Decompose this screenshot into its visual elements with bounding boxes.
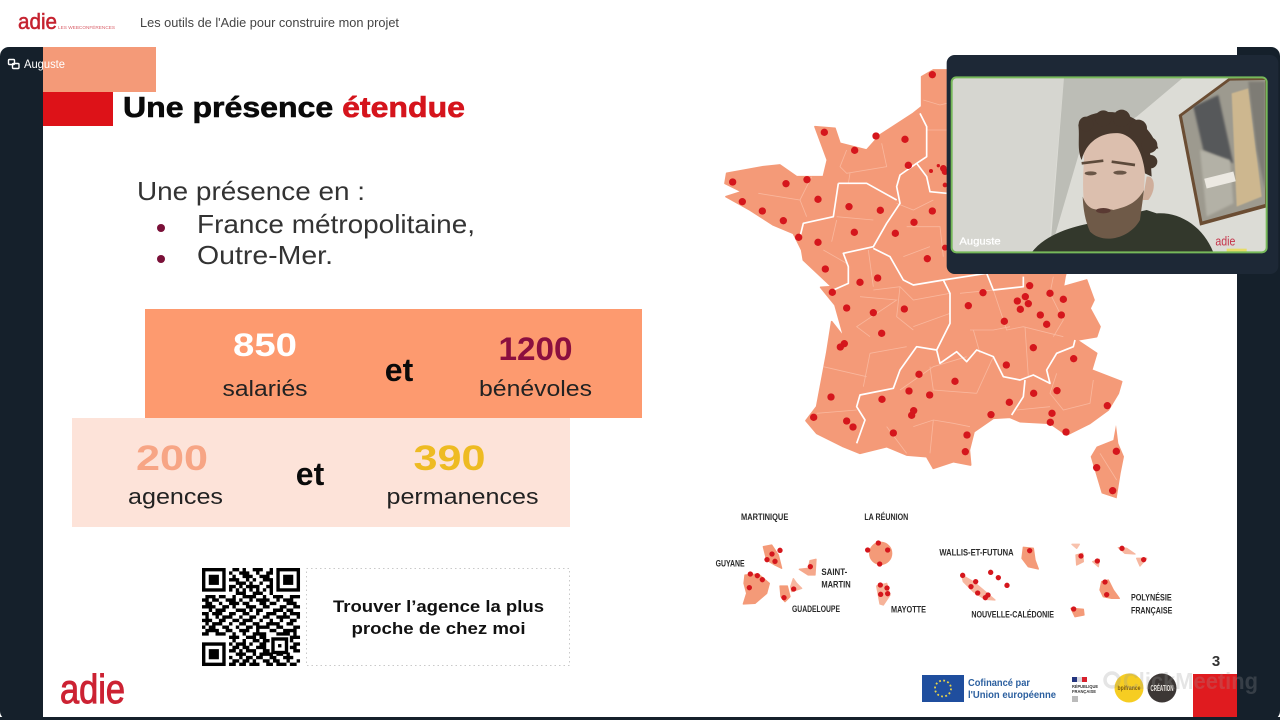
French Republic logo: FRANÇAISE — [1072, 689, 1096, 694]
webinar logo — [18, 9, 115, 34]
icon: screen share — [8, 60, 19, 68]
webinar logo: LES WEBCONFÉRENCES — [58, 25, 115, 30]
stat panel: locations: agences — [128, 484, 223, 509]
Corsica — [1091, 425, 1124, 498]
yellow partner badge — [1114, 674, 1144, 702]
stat panel: team — [145, 309, 642, 418]
territory labels: MARTIN — [821, 579, 851, 589]
presenter tag — [8, 57, 65, 71]
stat panel: team: salariés — [222, 376, 308, 401]
territory labels — [716, 512, 1172, 620]
ClickMeeting watermark: ClickMeeting — [1123, 668, 1258, 694]
presenter hair — [1078, 110, 1158, 177]
intro list: Outre-Mer. — [197, 240, 333, 270]
agency dots — [729, 71, 1120, 494]
territory labels: GUADELOUPE — [792, 604, 840, 614]
French Republic logo — [1072, 677, 1098, 702]
presenter — [1032, 110, 1213, 252]
stat panel: locations: et — [296, 456, 325, 492]
stat panel: team: 1200 — [498, 331, 572, 367]
wall poster — [1179, 77, 1267, 226]
territory labels: GUYANE — [716, 559, 745, 569]
presenter name: Auguste — [959, 236, 1001, 247]
funder logos — [922, 674, 1176, 702]
territory labels: SAINT- — [821, 567, 847, 577]
yellow partner badge: bpifrance — [1118, 686, 1141, 692]
EU cofunding text — [968, 677, 1056, 701]
stat panel: locations: 200 — [136, 439, 208, 478]
active speaker border — [952, 77, 1267, 252]
map: overseas territories — [716, 512, 1172, 620]
video panel — [947, 55, 1278, 274]
French Republic logo: RÉPUBLIQUE — [1072, 682, 1098, 689]
agency finder callout — [306, 568, 570, 666]
camera feed — [952, 77, 1267, 252]
QR code — [202, 570, 300, 664]
mainland outline — [725, 70, 1122, 468]
territory labels: FRANÇAISE — [1131, 605, 1172, 615]
intro list: France métropolitaine, — [197, 209, 475, 239]
page number: 3 — [1212, 653, 1220, 670]
stat panel: locations: permanences — [386, 484, 538, 509]
map: metropolitan France — [725, 70, 1124, 498]
page corner block — [1193, 674, 1237, 717]
territory labels: MAYOTTE — [891, 604, 926, 614]
dark partner badge: CRÉATION — [1150, 684, 1174, 693]
background adie sign: adie — [1215, 234, 1235, 248]
webinar logo: adie — [18, 9, 57, 34]
stat panel: team: 850 — [233, 327, 297, 363]
intro list: Une présence en : — [137, 176, 365, 206]
stat panel: team: et — [385, 352, 414, 388]
stat panel: locations: 390 — [414, 439, 486, 478]
territory labels: LA RÉUNION — [864, 512, 909, 522]
adie logo: adie — [60, 666, 125, 712]
agency finder callout: proche de chez moi — [352, 619, 526, 638]
EU flag — [922, 675, 964, 702]
EU cofunding text: Cofinancé par — [968, 677, 1030, 689]
territory labels: POLYNÉSIE — [1131, 593, 1172, 603]
territory shapes — [743, 542, 1147, 617]
territory labels: NOUVELLE-CALÉDONIE — [971, 610, 1054, 620]
top header bar — [0, 0, 1280, 47]
territory labels: WALLIS-ET-FUTUNA — [939, 547, 1014, 557]
overseas dots — [747, 540, 1146, 612]
slide title: Une présence étendue — [123, 92, 465, 124]
title decoration blocks — [43, 47, 156, 126]
agency finder callout: Trouver l’agence la plus — [333, 597, 544, 616]
stat panel: locations — [72, 418, 570, 527]
department borders — [758, 100, 1117, 480]
presenter tag: Auguste — [24, 57, 65, 71]
territory labels: MARTINIQUE — [741, 512, 788, 522]
intro list — [137, 176, 475, 270]
region borders — [800, 113, 1075, 443]
EU cofunding text: l'Union européenne — [968, 689, 1056, 701]
dark partner badge — [1148, 674, 1176, 702]
stat panel: team: bénévoles — [479, 376, 592, 401]
webinar title: Les outils de l'Adie pour construire mon projet — [140, 15, 399, 30]
